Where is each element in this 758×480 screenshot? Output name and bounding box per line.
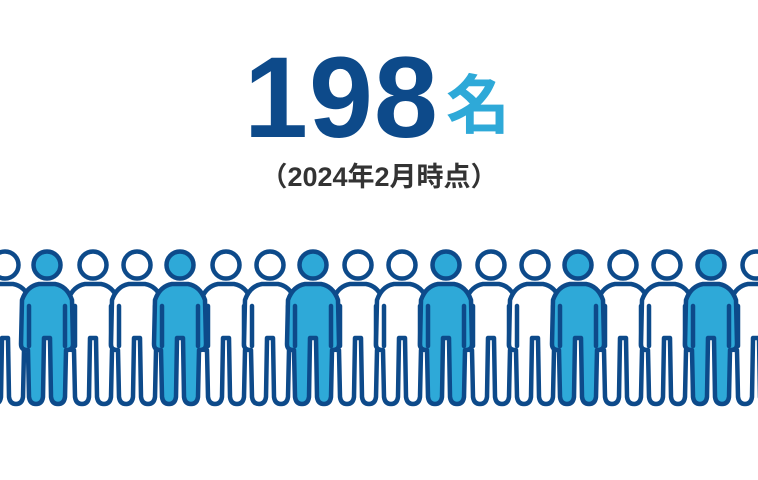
subtitle: date: （2024年2月時点） [260,162,498,192]
title: count: 198 [244,34,439,162]
title unit: 名 [446,70,510,142]
